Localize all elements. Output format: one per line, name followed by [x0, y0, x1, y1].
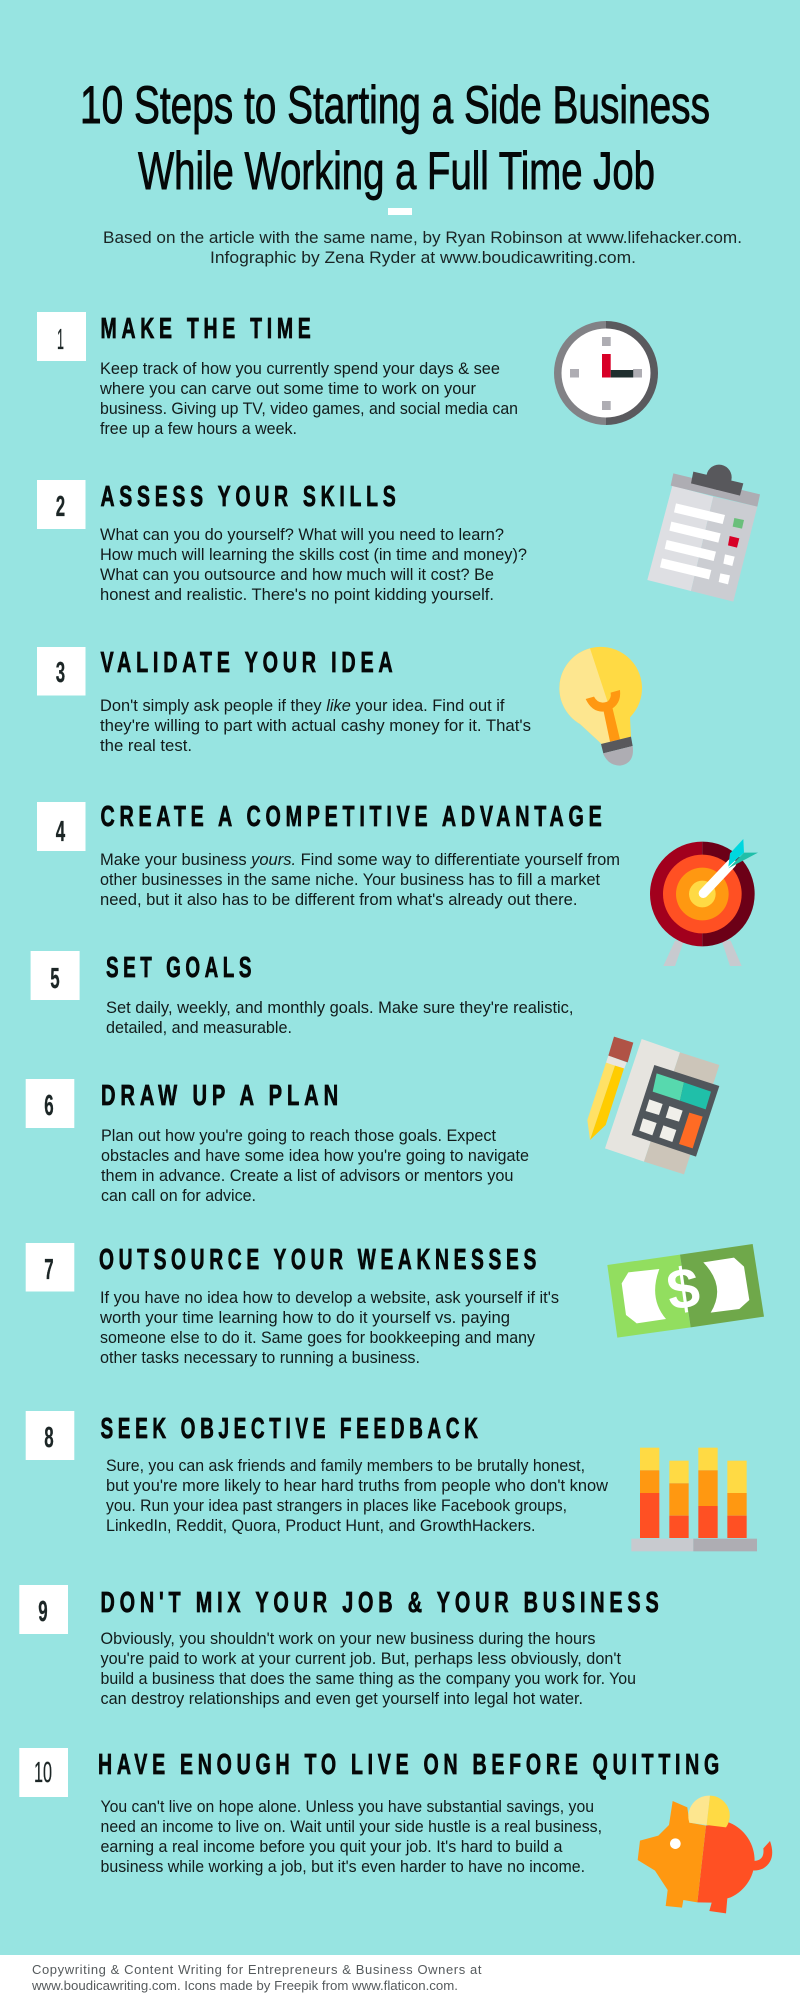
number badge 3: [37, 647, 86, 696]
subtitle credits: Based on the article with the same name, by Ryan Robinson at www.lifehacker.com.: [103, 229, 742, 247]
number badge 1: [37, 312, 86, 361]
number badge 6: [26, 1079, 74, 1128]
footer: www.boudicawriting.com. Icons made by Freepik from www.flaticon.com.: [31, 1978, 458, 1993]
icon: target with arrow: [650, 839, 758, 966]
body text step 10: You can't live on hope alone. Unless you have substantial savings, you: [100, 1798, 594, 1816]
body text step 10: business while working a job, but it's even harder to have no income.: [100, 1858, 585, 1876]
body text step 2: [100, 526, 527, 604]
body text step 2: What can you outsource and how much will it cost? Be: [100, 566, 494, 584]
body text step 8: but you're more likely to hear hard truths from people who don't know: [106, 1477, 608, 1495]
body text step 8: [106, 1457, 608, 1535]
heading: assess your skills: ASSESS YOUR SKILLS: [100, 481, 400, 513]
number badge 5: [31, 951, 80, 1000]
number badge 10: [19, 1748, 68, 1797]
panel: step 1: [37, 312, 658, 438]
body text step 1: [99, 360, 518, 438]
icon: pencil and calculator: [587, 1037, 719, 1174]
footer: [0, 1955, 800, 2000]
panel: step 6: [26, 1037, 719, 1205]
body text step 1: business. Giving up TV, video games, and social media can: [100, 400, 518, 418]
body text step 5: detailed, and measurable.: [106, 1019, 292, 1037]
heading: set goals: SET GOALS: [106, 952, 256, 984]
panel: step 2: [37, 465, 760, 604]
body text step 6: them in advance. Create a list of advisors or mentors you: [101, 1167, 514, 1185]
body text step 2: What can you do yourself? What will you need to learn?: [100, 526, 504, 544]
panel: step 7: [26, 1243, 764, 1367]
number badge 2: [37, 480, 86, 529]
panel: step 8: [26, 1411, 757, 1551]
icon: dollar bill: $: [663, 1255, 704, 1323]
panel: step 10: [19, 1748, 772, 1913]
number badge 9: 9: [38, 1596, 48, 1628]
body text step 7: other tasks necessary to running a business.: [100, 1349, 420, 1367]
footer: Copywriting & Content Writing for Entrepreneurs & Business Owners at: [32, 1962, 482, 1977]
body text step 3: Don't simply ask people if they like your idea. Find out if: [100, 697, 505, 715]
heading: seek objective feedback: SEEK OBJECTIVE FEEDBACK: [100, 1413, 482, 1445]
body text step 9: [100, 1630, 636, 1708]
number badge 1: 1: [57, 324, 64, 356]
body text step 1: free up a few hours a week.: [100, 420, 297, 438]
body text step 3: the real test.: [100, 737, 192, 755]
number badge 5: 5: [50, 963, 60, 995]
body text step 8: Sure, you can ask friends and family members to be brutally honest,: [106, 1457, 585, 1475]
body text step 2: honest and realistic. There's no point kidding yourself.: [100, 586, 494, 604]
number badge 7: [26, 1243, 74, 1292]
number badge 6: 6: [44, 1090, 54, 1122]
body text step 8: LinkedIn, Reddit, Quora, Product Hunt, and GrowthHackers.: [106, 1517, 536, 1535]
body text step 6: Plan out how you're going to reach those goals. Expect: [101, 1127, 496, 1145]
icon: clock: [554, 321, 658, 425]
panel: step 3: [37, 647, 642, 766]
body text step 3: they're willing to part with actual cashy money for it. That's: [100, 717, 531, 735]
body text step 1: Keep track of how you currently spend your days & see: [100, 360, 500, 378]
subtitle credits: [103, 229, 742, 267]
panel: step 4: [37, 801, 758, 966]
body text step 5: [106, 999, 574, 1037]
icon: clipboard: [647, 465, 760, 602]
icon: bar chart: [631, 1448, 757, 1551]
body text step 2: How much will learning the skills cost (in time and money)?: [100, 546, 527, 564]
body text step 4: Make your business yours. Find some way to differentiate yourself from: [100, 851, 620, 869]
number badge 3: 3: [56, 657, 65, 689]
number badge 10: 10: [34, 1757, 52, 1789]
body text step 4: need, but it also has to be different from what's already out there.: [100, 891, 578, 909]
heading: draw up a plan: DRAW UP A PLAN: [101, 1080, 343, 1112]
body text step 9: Obviously, you shouldn't work on your new business during the hours: [100, 1630, 596, 1648]
body text step 9: build a business that does the same thing as the company you work for. You: [100, 1670, 636, 1688]
body text step 7: [99, 1289, 559, 1367]
body text step 4: [100, 851, 620, 909]
body text step 3: [100, 697, 531, 755]
number badge 8: [26, 1411, 74, 1460]
title accent bar: [388, 208, 412, 215]
heading: make the time: MAKE THE TIME: [100, 313, 316, 345]
title: [80, 76, 710, 201]
body text step 5: Set daily, weekly, and monthly goals. Make sure they're realistic,: [106, 999, 574, 1017]
icon: dollar bill: [607, 1244, 764, 1338]
heading: validate your idea: VALIDATE YOUR IDEA: [100, 647, 398, 679]
body text step 9: you're paid to work at your current job. But, perhaps less obviously, don't: [100, 1650, 621, 1668]
subtitle credits: Infographic by Zena Ryder at www.boudicawriting.com.: [210, 249, 636, 267]
icon: piggy bank: [638, 1796, 772, 1913]
body text step 7: worth your time learning how to do it yourself vs. paying: [99, 1309, 510, 1327]
body text step 9: can destroy relationships and even get yourself into legal hot water.: [100, 1690, 583, 1708]
body text step 6: [101, 1127, 529, 1205]
panel: step 5: [31, 951, 574, 1037]
body text step 10: earning a real income before you quit your job. It's hard to build a: [100, 1838, 563, 1856]
number badge 4: [37, 802, 86, 851]
number badge 2: 2: [56, 491, 65, 523]
body text step 7: someone else to do it. Same goes for bookkeeping and many: [100, 1329, 536, 1347]
number badge 7: 7: [44, 1254, 54, 1286]
number badge 4: 4: [56, 816, 65, 848]
number badge 8: 8: [44, 1422, 54, 1454]
body text step 10: need an income to live on. Wait until your side hustle is a real business,: [100, 1818, 602, 1836]
body text step 10: [100, 1798, 602, 1876]
body text step 1: where you can carve out some time to work on your: [99, 380, 476, 398]
body text step 8: you. Run your idea past strangers in places like Facebook groups,: [106, 1497, 567, 1515]
panel: step 9: [19, 1585, 664, 1708]
body text step 7: If you have no idea how to develop a website, ask yourself if it's: [100, 1289, 559, 1307]
heading: outsource your weaknesses: OUTSOURCE YOUR WEAKNESSES: [99, 1244, 541, 1276]
icon: light bulb: [559, 647, 642, 766]
number badge 9: [19, 1585, 68, 1634]
body text step 6: can call on for advice.: [101, 1187, 256, 1205]
body text step 6: obstacles and have some idea how you're going to navigate: [101, 1147, 529, 1165]
body text step 4: other businesses in the same niche. Your business has to fill a market: [100, 871, 600, 889]
